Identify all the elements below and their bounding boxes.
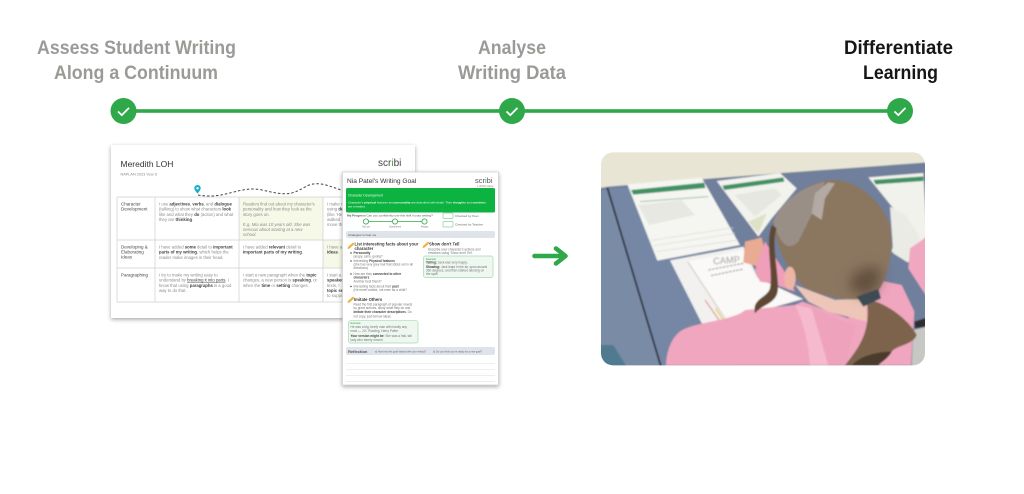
reflection section: Reflection bbox=[348, 349, 368, 354]
continuum path with location pin bbox=[194, 184, 396, 196]
strategy: list interesting facts: How are they connected to other bbox=[354, 272, 402, 276]
row: paragraphing: texts, I bbox=[327, 283, 340, 288]
strategy: imitate others: Your version might be: She was a frail, tall bbox=[350, 334, 412, 338]
progress tracker: Checked by Peer bbox=[455, 214, 479, 218]
student sweater bbox=[666, 280, 914, 365]
row: paragraphing: know that using paragraphs is a good bbox=[159, 283, 232, 288]
paper: student writing sheet bbox=[670, 247, 803, 324]
ear bbox=[784, 267, 796, 290]
strategy: imitate others: Imitate Others bbox=[354, 297, 383, 302]
row: character development: I use adjectives, verbs, and dialogue bbox=[159, 202, 232, 206]
goal banner: Character Development bbox=[348, 194, 383, 198]
logo: scribi small: scribi bbox=[475, 176, 493, 185]
strategy: list interesting facts: Interesting Physical features bbox=[354, 259, 395, 263]
heading: step 2: Analyse bbox=[478, 38, 546, 59]
row: paragraphing: to suppo bbox=[327, 293, 344, 298]
strategies bar: Strategies to help me bbox=[348, 233, 377, 237]
panel: writing goal worksheet bbox=[342, 172, 498, 385]
reflection section: b) Do you think you're ready for a new goal? bbox=[433, 350, 483, 354]
heading: step 2 bbox=[458, 38, 566, 84]
row: character development: Readers find out about my character's bbox=[243, 202, 315, 206]
document subtitle: NAPLAN 2023 Year 5 bbox=[120, 172, 157, 176]
strategy: show don't tell: emotions using 'Show don't Tell'. bbox=[428, 251, 473, 255]
strategy: list interesting facts: List interesting facts about your bbox=[354, 242, 419, 246]
strategy: imitate others: neck — J.K. Rowling, Harry Potter bbox=[350, 329, 398, 333]
strategy: imitate others: Example bbox=[350, 321, 361, 325]
row: paragraphing: when the time or setting changes. bbox=[243, 283, 309, 288]
row: character development bbox=[121, 202, 347, 237]
hair tie bbox=[857, 289, 881, 307]
heading: step 1: Assess Student Writing bbox=[37, 38, 236, 59]
progress tracker: Checked by Teacher bbox=[455, 222, 483, 226]
strategy: list interesting facts bbox=[348, 242, 419, 292]
panel: writing continuum document bbox=[111, 145, 415, 318]
heading: step 3: Learning bbox=[863, 63, 938, 84]
progress tracker: Not yet bbox=[362, 226, 370, 228]
row: paragraphing: way to do that. bbox=[159, 288, 187, 293]
row: paragraphing bbox=[121, 272, 344, 298]
strategy: show don't tell: Showing: Jack leapt in the air, spun around bbox=[426, 265, 487, 269]
heading: step 3: Differentiate bbox=[844, 38, 953, 59]
strategy: show don't tell: the spot! bbox=[426, 272, 438, 276]
reflection section bbox=[346, 347, 495, 382]
heading: step 3 bbox=[844, 38, 953, 84]
row: developing and elaborating ideas: I have added relevant detail to bbox=[243, 244, 302, 250]
heading: step 1: Along a Continuum bbox=[54, 63, 218, 84]
icon: check 1 bbox=[110, 98, 136, 124]
goal banner: are revealed. bbox=[348, 204, 366, 208]
progress tracker: Sometimes bbox=[389, 226, 402, 228]
strategy: show don't tell: Describe your character's actions and bbox=[428, 247, 481, 251]
row: developing and elaborating ideas: Developing & bbox=[121, 244, 148, 250]
row: character development: Character bbox=[121, 202, 141, 206]
strategy: imitate others: He was a big, beefy man with hardly any bbox=[350, 325, 407, 329]
strategy: imitate others: Read the first paragraph of popular novels bbox=[354, 302, 413, 306]
row: character development: I make my bbox=[327, 202, 347, 206]
icon: check 2 bbox=[499, 98, 525, 124]
student hand bbox=[743, 238, 765, 267]
row: paragraphing: I try to make my writing easy to bbox=[159, 272, 218, 278]
paper: goal sheet 2 bbox=[717, 173, 797, 237]
heading: step 2: Writing Data bbox=[458, 63, 566, 84]
strategy: imitate others: imitate their character descriptions. Do bbox=[354, 310, 412, 314]
row: developing and elaborating ideas bbox=[121, 244, 343, 260]
row: paragraphing: I start a new paragraph when the topic bbox=[243, 272, 317, 278]
strategy: show don't tell bbox=[422, 242, 493, 278]
paper: goal sheet 1 bbox=[627, 178, 740, 261]
table bbox=[598, 162, 928, 368]
continuum table bbox=[117, 197, 415, 302]
strategy: show don't tell: Example bbox=[426, 257, 437, 261]
worksheet title: Nia Patel's Writing Goal bbox=[347, 178, 417, 185]
document title: Meredith LOH bbox=[120, 159, 173, 169]
paper: student writing sheet: CAMP bbox=[713, 254, 740, 266]
row: character development: move th bbox=[327, 222, 343, 227]
strategy: show don't tell: 360 degrees, and then started dancing on bbox=[426, 268, 484, 272]
row: character development: personality and how they look as the bbox=[243, 206, 312, 212]
row: paragraphing: understand by breaking it into parts. I bbox=[159, 278, 229, 282]
logo: scribi small bbox=[475, 176, 494, 188]
row: character development: school. bbox=[243, 232, 256, 237]
row: character development: using de bbox=[327, 206, 344, 212]
row: character development: nervous about starting at a new bbox=[243, 227, 303, 232]
row: developing and elaborating ideas: ideas. bbox=[327, 250, 339, 254]
ponytail bbox=[845, 300, 917, 365]
logo: scribi: scribi bbox=[378, 158, 401, 169]
timeline with three checkpoints bbox=[110, 98, 913, 124]
strategy: imitate others: not copy, just borrow ideas. bbox=[354, 314, 392, 318]
row: character development: E.g. Mia was 10 years old. She was bbox=[243, 222, 311, 227]
arrow bbox=[534, 248, 566, 264]
icon: check 3 bbox=[887, 98, 913, 124]
dark object corner bbox=[914, 318, 927, 328]
progress tracker: Always bbox=[421, 226, 429, 228]
strategy: show don't tell: Show don't Tell bbox=[429, 242, 459, 246]
photo: student writing at a desk bbox=[598, 150, 928, 368]
row: paragraphing: changes, a new person is speaking, or bbox=[243, 278, 318, 282]
strategy: imitate others: by great authors, study what they do and bbox=[354, 306, 410, 310]
reflection section: a) How has this goal helped with your writing? bbox=[375, 350, 426, 354]
row: developing and elaborating ideas: Ideas bbox=[121, 254, 133, 260]
progress tracker bbox=[347, 213, 483, 228]
row: developing and elaborating ideas: I have a bbox=[327, 244, 343, 250]
hair bbox=[773, 180, 892, 299]
strategy: list interesting facts: characters bbox=[354, 276, 370, 280]
bottom left object bbox=[601, 344, 626, 366]
row: character development: (talking) to show what characters look bbox=[159, 206, 232, 212]
goal banner: Character's physical features and personality are described with detail. Their thoughts and emotions bbox=[348, 201, 486, 205]
row: character development: (like 'He bbox=[327, 212, 343, 217]
strategy: list interesting facts: character bbox=[354, 246, 374, 251]
strategy: list interesting facts: directions) bbox=[354, 266, 368, 270]
strategy: imitate others bbox=[348, 296, 418, 343]
row: paragraphing: I start a bbox=[327, 272, 342, 278]
strategy: list interesting facts: Personality bbox=[354, 251, 371, 255]
progress tracker: My Progress Can you confidently use this skill in your writing? bbox=[347, 214, 433, 218]
row: paragraphing: speaker bbox=[327, 278, 343, 282]
wall bbox=[601, 152, 925, 188]
strategy: list interesting facts: (angry, calm, goofy)? bbox=[354, 254, 383, 258]
strategy: list interesting facts: (she has very grey hair that sticks out in all bbox=[354, 262, 413, 266]
row: character development: like and what they do (action) and what bbox=[159, 212, 234, 217]
strategy: list interesting facts: Interesting facts about their past bbox=[354, 284, 399, 288]
row: character development: they are thinking. bbox=[159, 217, 193, 222]
heading: step 1 bbox=[37, 38, 236, 84]
strategy: list interesting facts: Another best friend? bbox=[354, 280, 382, 284]
goal banner bbox=[346, 188, 495, 212]
row: paragraphing: topic se bbox=[327, 288, 344, 293]
logo: scribi small: a UNSW startup bbox=[477, 185, 494, 188]
row: character development: walked bbox=[327, 217, 341, 222]
row: character development: story goes on. bbox=[243, 212, 270, 217]
row: character development: Development bbox=[121, 206, 148, 212]
strategy: show don't tell: Telling: Jack was very happy. bbox=[426, 260, 468, 264]
row: developing and elaborating ideas: parts of my writing, which helps the bbox=[159, 250, 229, 254]
row: developing and elaborating ideas: Elaborating bbox=[121, 250, 144, 254]
strategy: list interesting facts: (He never smiled, not even as a child? bbox=[354, 288, 407, 292]
neck bbox=[795, 285, 867, 322]
strategies bar bbox=[346, 231, 495, 238]
neighbouring student's sleeve bbox=[908, 237, 927, 297]
row: developing and elaborating ideas: important parts of my writing. bbox=[243, 250, 303, 254]
strategy: imitate others: lady who barely moved bbox=[350, 338, 383, 342]
paper: goal sheet 3 bbox=[868, 173, 927, 262]
row: paragraphing: Paragraphing bbox=[121, 272, 149, 278]
row: developing and elaborating ideas: reader make images in their head. bbox=[159, 255, 224, 260]
row: developing and elaborating ideas: I have added some detail to important bbox=[159, 244, 233, 250]
